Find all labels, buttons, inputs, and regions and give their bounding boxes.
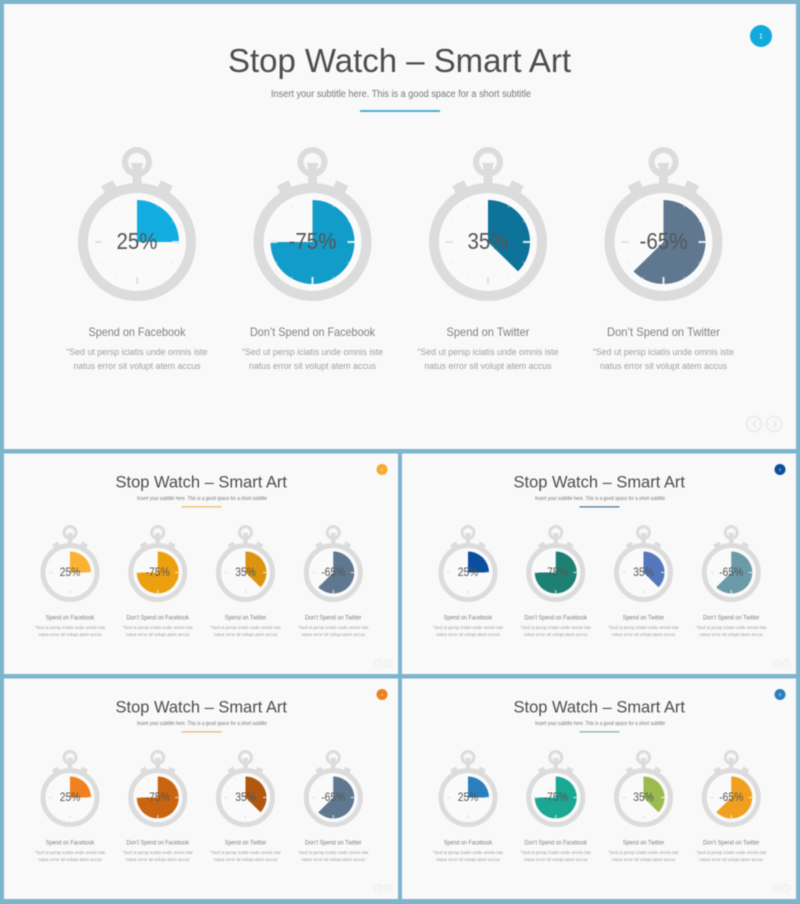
stopwatch 75%: -75%: [146, 567, 170, 579]
stopwatch 75%: -75%: [544, 792, 568, 804]
caption: Spend on Facebook: Spend on Facebook: [444, 616, 493, 622]
caption: Don't Spend on Twitter: natus error sit volupt atem accus: [700, 632, 764, 637]
caption: Don't Spend on Facebook: Don’t Spend on Facebook: [126, 616, 190, 622]
title: Stop Watch – Smart Art: [116, 474, 287, 492]
caption: Spend on Twitter: [210, 840, 281, 862]
stopwatch 35%: [218, 752, 272, 824]
caption: Spend on Facebook: [35, 616, 106, 637]
caption: Spend on Twitter: natus error sit volupt atem accus: [214, 857, 278, 862]
subtitle: Insert your subtitle here. This is a good space for a short subtitle: [271, 89, 531, 100]
caption: Don't Spend on Facebook: Don’t Spend on Facebook: [126, 840, 190, 846]
caption: Spend on Facebook: natus error sit volupt atem accus: [74, 361, 201, 371]
caption: Don't Spend on Twitter: “Sed ut persp iciatis unde omnis iste: [696, 625, 767, 630]
caption: Spend on Facebook: natus error sit volupt atem accus: [436, 632, 500, 637]
page badge: 4: [381, 693, 383, 697]
caption: Spend on Twitter: “Sed ut persp iciatis unde omnis iste: [608, 850, 679, 855]
stopwatch 35%: [616, 526, 670, 600]
caption: Don't Spend on Twitter: Don’t Spend on Twitter: [305, 616, 362, 622]
subtitle: Insert your subtitle here. This is a good space for a short subtitle: [535, 721, 665, 727]
caption: Don't Spend on Facebook: Don’t Spend on Facebook: [250, 325, 376, 339]
caption: Spend on Facebook: natus error sit volupt atem accus: [38, 632, 102, 637]
page badge: [774, 464, 786, 475]
title: Stop Watch – Smart Art: [116, 698, 287, 716]
caption: Don't Spend on Twitter: “Sed ut persp iciatis unde omnis iste: [298, 850, 369, 855]
caption: Don't Spend on Facebook: “Sed ut persp iciatis unde omnis iste: [520, 625, 591, 630]
caption: Don't Spend on Facebook: natus error sit volupt atem accus: [126, 857, 190, 862]
caption: Spend on Facebook: Spend on Facebook: [444, 840, 493, 846]
page badge: [774, 689, 786, 700]
caption: Don't Spend on Twitter: “Sed ut persp iciatis unde omnis iste: [298, 625, 369, 630]
stopwatch 65%: -65%: [719, 792, 743, 804]
panel: small slide, yellow theme: [4, 454, 398, 674]
caption: Don't Spend on Twitter: [696, 616, 767, 637]
stopwatch 25%: [43, 526, 97, 600]
panel: small slide, multicolour theme: [402, 678, 796, 899]
caption: Spend on Twitter: “Sed ut persp iciatis unde omnis iste: [608, 625, 679, 630]
caption: Don't Spend on Twitter: [298, 616, 369, 637]
caption: Don't Spend on Twitter: Don’t Spend on Twitter: [703, 616, 760, 622]
page badge: 5: [779, 693, 781, 697]
caption: Spend on Twitter: Spend on Twitter: [623, 616, 664, 622]
caption: Spend on Facebook: Spend on Facebook: [46, 840, 95, 846]
caption: Spend on Twitter: natus error sit volupt atem accus: [214, 632, 278, 637]
caption: Don't Spend on Twitter: Don’t Spend on Twitter: [305, 840, 362, 846]
stopwatch 65%: -65%: [321, 792, 345, 804]
caption: Spend on Twitter: Spend on Twitter: [225, 840, 266, 846]
accent underline: [580, 506, 620, 508]
subtitle: Insert your subtitle here. This is a good space for a short subtitle: [535, 496, 665, 502]
page badge: 2: [381, 468, 383, 472]
caption: Don't Spend on Facebook: [242, 325, 383, 371]
stopwatch 65%: [704, 752, 758, 824]
caption: Don't Spend on Twitter: “Sed ut persp iciatis unde omnis iste: [593, 347, 734, 357]
caption: Don't Spend on Facebook: [122, 616, 193, 637]
page badge: [750, 25, 772, 47]
page badge: 1: [759, 34, 763, 40]
caption: Spend on Twitter: “Sed ut persp iciatis unde omnis iste: [418, 347, 558, 357]
subtitle: Insert your subtitle here. This is a good space for a short subtitle: [137, 721, 267, 727]
stopwatch 25%: [43, 752, 97, 824]
caption: Don't Spend on Facebook: [520, 616, 591, 637]
caption: Spend on Facebook: “Sed ut persp iciatis unde omnis iste: [35, 850, 106, 855]
stopwatch 35%: 35%: [633, 792, 654, 804]
caption: Don't Spend on Facebook: “Sed ut persp iciatis unde omnis iste: [122, 850, 193, 855]
stopwatch 25%: 25%: [60, 567, 80, 579]
panel: small slide, navy and teal theme: [402, 454, 796, 674]
caption: Spend on Twitter: natus error sit volupt atem accus: [612, 857, 676, 862]
stopwatch: Spend on Twitter 35%: 35%: [468, 228, 508, 254]
stopwatch 75%: -75%: [544, 567, 568, 579]
caption: Don't Spend on Twitter: Don’t Spend on Twitter: [703, 840, 760, 846]
caption: Don't Spend on Twitter: [696, 840, 767, 862]
stopwatch 25%: 25%: [458, 567, 478, 579]
stopwatch: Don't Spend on Twitter 65%: -65%: [640, 228, 688, 254]
stopwatch 65%: [306, 752, 360, 824]
stopwatch: Don't Spend on Twitter 65%: [610, 150, 718, 296]
caption: Spend on Twitter: [210, 616, 281, 637]
title: Stop Watch – Smart Art: [228, 42, 571, 79]
caption: Don't Spend on Facebook: Don’t Spend on Facebook: [524, 840, 588, 846]
caption: Don't Spend on Facebook: [122, 840, 193, 862]
stopwatch 75%: [131, 526, 185, 600]
caption: Spend on Facebook: “Sed ut persp iciatis unde omnis iste: [433, 850, 504, 855]
stopwatch: Don't Spend on Facebook 75%: -75%: [288, 228, 336, 254]
caption: Spend on Facebook: natus error sit volupt atem accus: [436, 857, 500, 862]
stopwatch 35%: 35%: [235, 567, 256, 579]
page badge: [376, 464, 388, 475]
caption: Spend on Facebook: [66, 325, 208, 371]
caption: Don't Spend on Twitter: natus error sit volupt atem accus: [600, 361, 727, 371]
accent underline: [182, 506, 222, 508]
caption: Don't Spend on Facebook: natus error sit volupt atem accus: [524, 632, 588, 637]
title: Stop Watch – Smart Art: [514, 474, 685, 492]
caption: Spend on Facebook: Spend on Facebook: [88, 325, 186, 339]
page badge: [376, 689, 388, 700]
caption: Spend on Twitter: [418, 325, 558, 371]
caption: Spend on Facebook: natus error sit volupt atem accus: [38, 857, 102, 862]
stopwatch: Spend on Twitter 35%: [434, 150, 542, 296]
caption: Spend on Twitter: “Sed ut persp iciatis unde omnis iste: [210, 850, 281, 855]
stopwatch: Spend on Facebook 25%: [83, 150, 191, 296]
stopwatch 25%: 25%: [458, 792, 478, 804]
caption: Don't Spend on Facebook: natus error sit volupt atem accus: [126, 632, 190, 637]
caption: Spend on Twitter: natus error sit volupt atem accus: [612, 632, 676, 637]
stopwatch 35%: [218, 526, 272, 600]
caption: Spend on Twitter: natus error sit volupt atem accus: [424, 361, 552, 371]
caption: Spend on Facebook: [433, 616, 504, 637]
caption: Spend on Twitter: Spend on Twitter: [623, 840, 664, 846]
stopwatch 65%: -65%: [719, 567, 743, 579]
stopwatch 25%: 25%: [60, 792, 80, 804]
caption: Spend on Twitter: Spend on Twitter: [446, 325, 530, 339]
caption: Spend on Twitter: “Sed ut persp iciatis unde omnis iste: [210, 625, 281, 630]
stopwatch: Spend on Facebook 25%: 25%: [116, 228, 158, 254]
stopwatch 25%: [441, 752, 495, 824]
stopwatch 75%: -75%: [146, 792, 170, 804]
caption: Spend on Facebook: “Sed ut persp iciatis unde omnis iste: [66, 347, 208, 357]
caption: Don't Spend on Twitter: [593, 325, 734, 371]
caption: Don't Spend on Facebook: “Sed ut persp iciatis unde omnis iste: [242, 347, 383, 357]
navigation arrows: [375, 885, 392, 892]
navigation arrows: [746, 416, 782, 432]
caption: Don't Spend on Twitter: Don’t Spend on Twitter: [607, 325, 720, 339]
accent underline: [360, 110, 440, 112]
stopwatch 75%: [529, 752, 583, 824]
navigation arrows: [375, 660, 392, 667]
navigation arrows: [773, 660, 790, 667]
caption: Don't Spend on Twitter: natus error sit volupt atem accus: [302, 857, 366, 862]
caption: Don't Spend on Twitter: “Sed ut persp iciatis unde omnis iste: [696, 850, 767, 855]
accent underline: [580, 731, 620, 732]
panel: main slide, blue theme: [4, 4, 796, 449]
caption: Spend on Twitter: [608, 840, 679, 862]
caption: Don't Spend on Twitter: natus error sit volupt atem accus: [700, 857, 764, 862]
caption: Spend on Twitter: [608, 616, 679, 637]
caption: Spend on Twitter: Spend on Twitter: [225, 616, 266, 622]
stopwatch 35%: [616, 752, 670, 824]
caption: Don't Spend on Twitter: natus error sit volupt atem accus: [302, 632, 366, 637]
subtitle: Insert your subtitle here. This is a good space for a short subtitle: [137, 496, 267, 502]
accent underline: [182, 731, 222, 732]
caption: Spend on Facebook: “Sed ut persp iciatis unde omnis iste: [35, 625, 106, 630]
caption: Don't Spend on Facebook: Don’t Spend on Facebook: [524, 616, 588, 622]
panel: small slide, orange theme: [4, 678, 398, 899]
caption: Don't Spend on Facebook: [520, 840, 591, 862]
caption: Don't Spend on Facebook: “Sed ut persp iciatis unde omnis iste: [122, 625, 193, 630]
stopwatch 65%: -65%: [321, 567, 345, 579]
caption: Spend on Facebook: [433, 840, 504, 862]
caption: Spend on Facebook: [35, 840, 106, 862]
caption: Don't Spend on Facebook: natus error sit volupt atem accus: [249, 361, 376, 371]
stopwatch 65%: [306, 526, 360, 600]
stopwatch 75%: [131, 752, 185, 824]
page badge: 3: [779, 468, 781, 472]
caption: Don't Spend on Facebook: natus error sit volupt atem accus: [524, 857, 588, 862]
caption: Don't Spend on Twitter: [298, 840, 369, 862]
stopwatch 75%: [529, 526, 583, 600]
stopwatch: Don't Spend on Facebook 75%: [258, 150, 366, 296]
stopwatch 65%: [704, 526, 758, 600]
title: Stop Watch – Smart Art: [514, 698, 685, 716]
stopwatch 25%: [441, 526, 495, 600]
navigation arrows: [773, 885, 790, 892]
caption: Spend on Facebook: “Sed ut persp iciatis unde omnis iste: [433, 625, 504, 630]
stopwatch 35%: 35%: [633, 567, 654, 579]
caption: Spend on Facebook: Spend on Facebook: [46, 616, 95, 622]
caption: Don't Spend on Facebook: “Sed ut persp iciatis unde omnis iste: [520, 850, 591, 855]
stopwatch 35%: 35%: [235, 792, 256, 804]
